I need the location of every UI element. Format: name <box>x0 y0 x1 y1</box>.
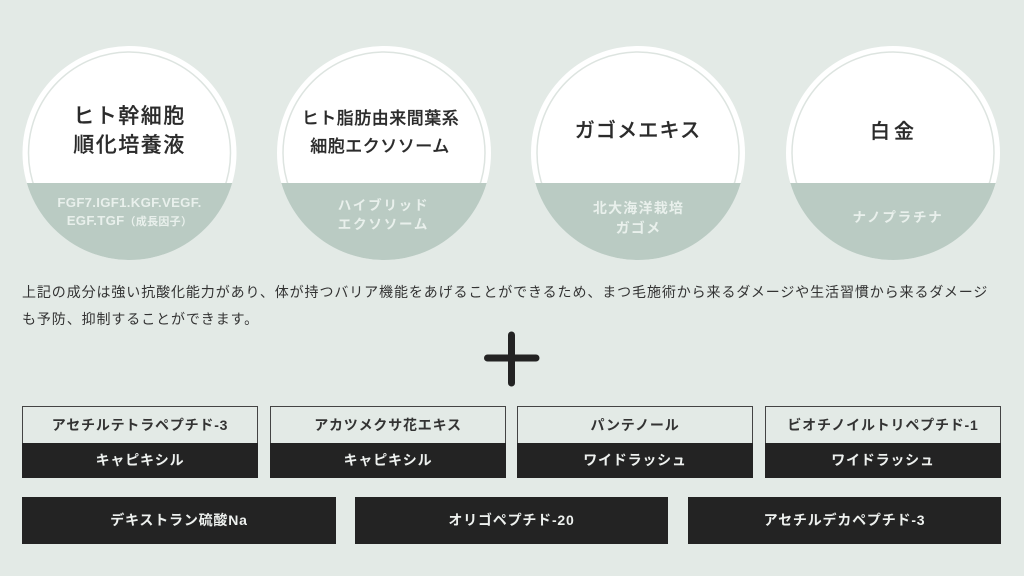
box: キャピキシル 1 <box>22 443 258 478</box>
box: アカツメクサ花エキス <box>270 406 506 443</box>
box: デキストラン硫酸Na <box>22 497 336 544</box>
box: アカツメクサ花エキス: アカツメクサ花エキス <box>314 417 462 433</box>
circle: ガゴメエキス: ガゴメ <box>616 220 661 236</box>
circle: ヒト脂肪由来間葉系細胞エクソソーム: エクソソーム <box>338 217 429 232</box>
box: オリゴペプチド-20: オリゴペプチド-20 <box>448 512 575 528</box>
description text: 上記の成分は強い抗酸化能力があり、体が持つバリア機能をあげることができるため、まつ毛施術から来るダメージや生活習慣から来るダメージも予防、抑制することができます。 <box>22 284 988 327</box>
circle: ヒト幹細胞順化培養液: ヒト幹細胞 <box>73 105 186 128</box>
box: オリゴペプチド-20 <box>355 497 668 544</box>
circle: ヒト脂肪由来間葉系細胞エクソソーム <box>277 46 491 260</box>
box: アセチルテトラペプチド-3 <box>22 406 258 443</box>
circle: ヒト幹細胞順化培養液 <box>22 46 236 260</box>
circle: ガゴメエキス: 北大海洋栽培 <box>593 200 684 216</box>
box: キャピキシル 2: キャピキシル <box>344 452 432 468</box>
box: デキストラン硫酸Na: デキストラン硫酸Na <box>110 512 248 528</box>
box: パンテノール <box>517 406 753 443</box>
box: キャピキシル 1: キャピキシル <box>96 452 184 468</box>
circle: ヒト幹細胞順化培養液: EGF.TGF（成長因子） <box>67 213 192 228</box>
box: ビオチノイルトリペプチド-1 <box>765 406 1001 443</box>
box: キャピキシル 2 <box>270 443 506 478</box>
circle: ヒト脂肪由来間葉系細胞エクソソーム: ハイブリッド <box>338 197 429 213</box>
box: アセチルデカペプチド-3: アセチルデカペプチド-3 <box>764 512 925 528</box>
circle: ヒト脂肪由来間葉系細胞エクソソーム: ヒト脂肪由来間葉系 <box>302 109 459 128</box>
box: パンテノール: パンテノール <box>590 417 680 433</box>
circle: ヒト幹細胞順化培養液: FGF7.IGF1.KGF.VEGF. <box>57 195 202 210</box>
circle: ヒト幹細胞順化培養液: 順化培養液 <box>73 134 186 157</box>
ingredient circles <box>22 46 1000 260</box>
circle: ガゴメエキス: ガゴメエキス <box>575 118 701 142</box>
box: アセチルデカペプチド-3 <box>688 497 1001 544</box>
box: ワイドラッシュ 1: ワイドラッシュ <box>583 452 687 468</box>
circle: 白金: 白金 <box>870 120 918 143</box>
circle: 白金 <box>786 46 1000 260</box>
circle: ヒト脂肪由来間葉系細胞エクソソーム: 細胞エクソソーム <box>310 137 450 156</box>
circle: 白金: ナノプラチナ <box>852 210 944 225</box>
circle: ガゴメエキス <box>531 46 745 260</box>
box: ワイドラッシュ 2: ワイドラッシュ <box>831 452 935 468</box>
box: アセチルテトラペプチド-3: アセチルテトラペプチド-3 <box>52 417 228 433</box>
box: ビオチノイルトリペプチド-1: ビオチノイルトリペプチド-1 <box>787 417 979 433</box>
icon: plus <box>484 332 540 386</box>
box: ワイドラッシュ 1 <box>517 443 753 478</box>
box: ワイドラッシュ 2 <box>765 443 1001 478</box>
